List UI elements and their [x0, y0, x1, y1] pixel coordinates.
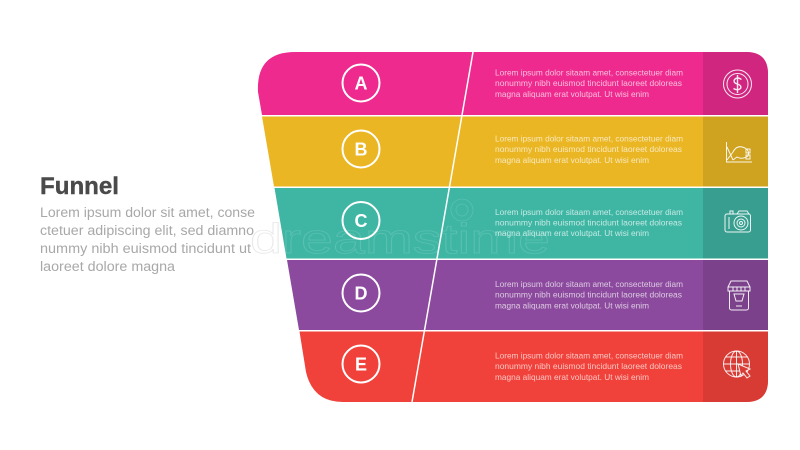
band D: Lorem ipsum dolor sitaam amet, consectetuer diam: [495, 279, 683, 289]
band C: Lorem ipsum dolor sitaam amet, consectetuer diam: [495, 207, 683, 217]
band C: magna aliquam erat volutpat. Ut wisi enim: [495, 228, 649, 238]
description text: nummy nibh euismod tincidunt ut: [40, 241, 251, 257]
band B: magna aliquam erat volutpat. Ut wisi enim: [495, 155, 649, 165]
band D: magna aliquam erat volutpat. Ut wisi enim: [495, 300, 649, 310]
band D: D: [354, 284, 368, 304]
diagonal divider line: [412, 52, 473, 402]
band E: Lorem ipsum dolor sitaam amet, consectetuer diam: [495, 350, 683, 360]
band A: magna aliquam erat volutpat. Ut wisi enim: [495, 89, 649, 99]
band A: Lorem ipsum dolor sitaam amet, consectetuer diam: [495, 68, 683, 78]
band A: nonummy nibh euismod tincidunt laoreet doloreas: [495, 78, 682, 88]
band A: [258, 52, 768, 115]
icon: mobile shop: [728, 281, 750, 310]
band B: nonummy nibh euismod tincidunt laoreet doloreas: [495, 144, 682, 154]
band D: nonummy nibh euismod tincidunt laoreet doloreas: [495, 290, 682, 300]
watermark outside funnel: dreamstime: [250, 215, 550, 262]
description text: laoreet dolore magna: [40, 259, 175, 275]
icon: dollar coin: [724, 70, 752, 98]
band B: B: [354, 140, 368, 160]
band A: A: [354, 74, 368, 94]
icon: globe with cursor: [724, 351, 750, 378]
icon: camera: [725, 211, 750, 232]
icon: chart: [726, 142, 752, 162]
stock watermark: dreamstime: [250, 215, 550, 262]
band B: [262, 116, 768, 186]
band C: [274, 188, 768, 258]
band C: nonummy nibh euismod tincidunt laoreet doloreas: [495, 218, 682, 228]
band C: C: [354, 211, 368, 231]
description text: Lorem ipsum dolor sit amet, conse: [40, 205, 255, 221]
band B: Lorem ipsum dolor sitaam amet, consectetuer diam: [495, 134, 683, 144]
band D: [287, 260, 768, 330]
band E: nonummy nibh euismod tincidunt laoreet doloreas: [495, 361, 682, 371]
title: Funnel: [40, 173, 119, 200]
band E: E: [355, 354, 367, 374]
description text: ctetuer adipiscing elit, sed diamno: [40, 223, 254, 239]
band E: magna aliquam erat volutpat. Ut wisi enim: [495, 372, 649, 382]
band E: [300, 332, 768, 402]
description text: [40, 205, 255, 275]
stock watermark: [250, 199, 550, 262]
